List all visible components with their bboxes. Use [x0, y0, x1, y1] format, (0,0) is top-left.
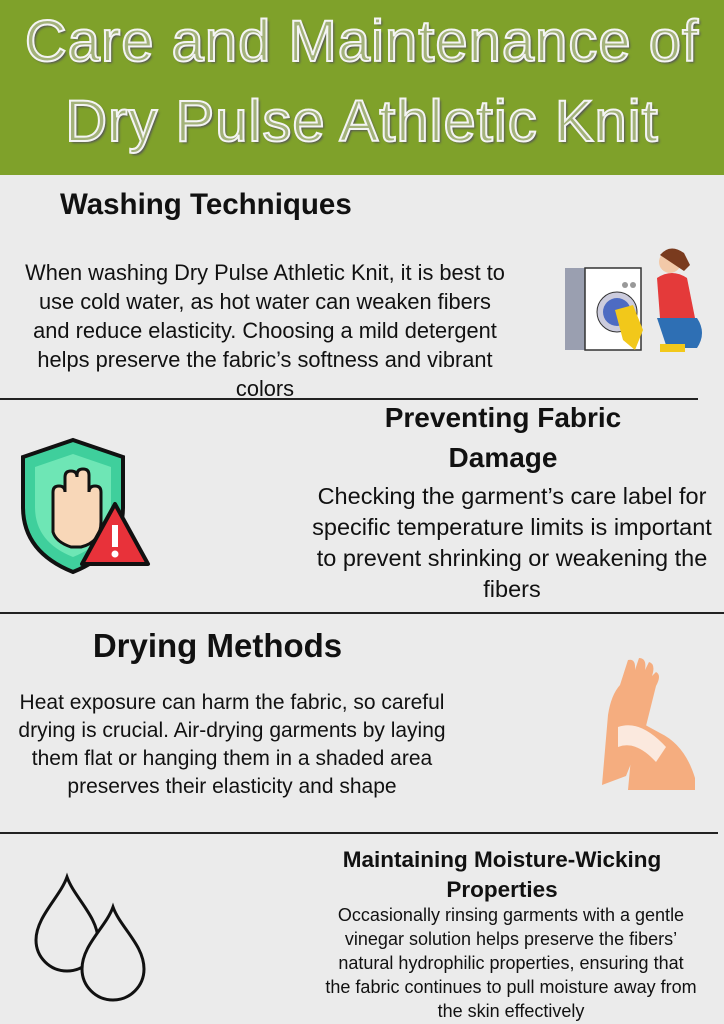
text: moisture: vinegar solution helps preserve the fibers’: [345, 929, 677, 949]
text: washing: [25, 260, 505, 401]
text: drying: drying is crucial. Air-drying garments by laying: [18, 719, 446, 742]
text: moisture: the fabric continues to pull moisture away from: [325, 977, 697, 997]
text: washing: When washing Dry Pulse Athletic Knit, it is best to: [25, 260, 505, 285]
text: washing: helps preserve the fabric’s softness and vibrant: [37, 347, 493, 372]
heading: preventing fabric damage: Damage: [449, 442, 557, 473]
heading: preventing fabric damage: Preventing Fabric: [385, 402, 621, 433]
text: moisture: the skin effectively: [438, 1001, 584, 1021]
text: drying: them flat or hanging them in a shaded area: [32, 747, 432, 770]
text: moisture: Occasionally rinsing garments with a gentle: [338, 905, 684, 925]
heading: drying methods: Drying Methods: [93, 627, 342, 664]
header banner: [0, 0, 724, 175]
icon: washing machine woman: [565, 248, 702, 352]
text: washing: colors: [236, 376, 294, 401]
text: moisture: natural hydrophilic properties, ensuring that: [338, 953, 684, 973]
icon: hands: [602, 658, 695, 790]
text: drying: Heat exposure can harm the fabric, so careful: [20, 691, 444, 714]
text: moisture: [325, 905, 697, 1021]
heading: moisture-wicking: [343, 847, 661, 902]
text: preventing: [312, 483, 712, 602]
heading: preventing fabric damage: [385, 402, 621, 473]
text: drying: preserves their elasticity and shape: [67, 775, 397, 798]
text: washing: and reduce elasticity. Choosing a mild detergent: [33, 318, 497, 343]
heading: moisture-wicking: Maintaining Moisture-Wicking: [343, 847, 661, 872]
text: drying: [18, 691, 446, 798]
text: preventing: specific temperature limits is important: [312, 514, 712, 540]
heading: washing techniques: Washing Techniques: [60, 188, 352, 221]
title: Dry Pulse Athletic Knit: [65, 89, 659, 154]
text: preventing: Checking the garment’s care label for: [318, 483, 706, 509]
title: [25, 9, 702, 156]
text: washing: use cold water, as hot water can weaken fibers: [39, 289, 491, 314]
text: preventing: to prevent shrinking or weakening the: [317, 545, 707, 571]
icon: shield with hand and warning: [21, 438, 150, 574]
heading: moisture-wicking: Properties: [446, 877, 558, 902]
title: Care and Maintenance of: [25, 9, 699, 74]
icon: water drops: [34, 872, 146, 1002]
text: preventing: fibers: [483, 576, 541, 602]
